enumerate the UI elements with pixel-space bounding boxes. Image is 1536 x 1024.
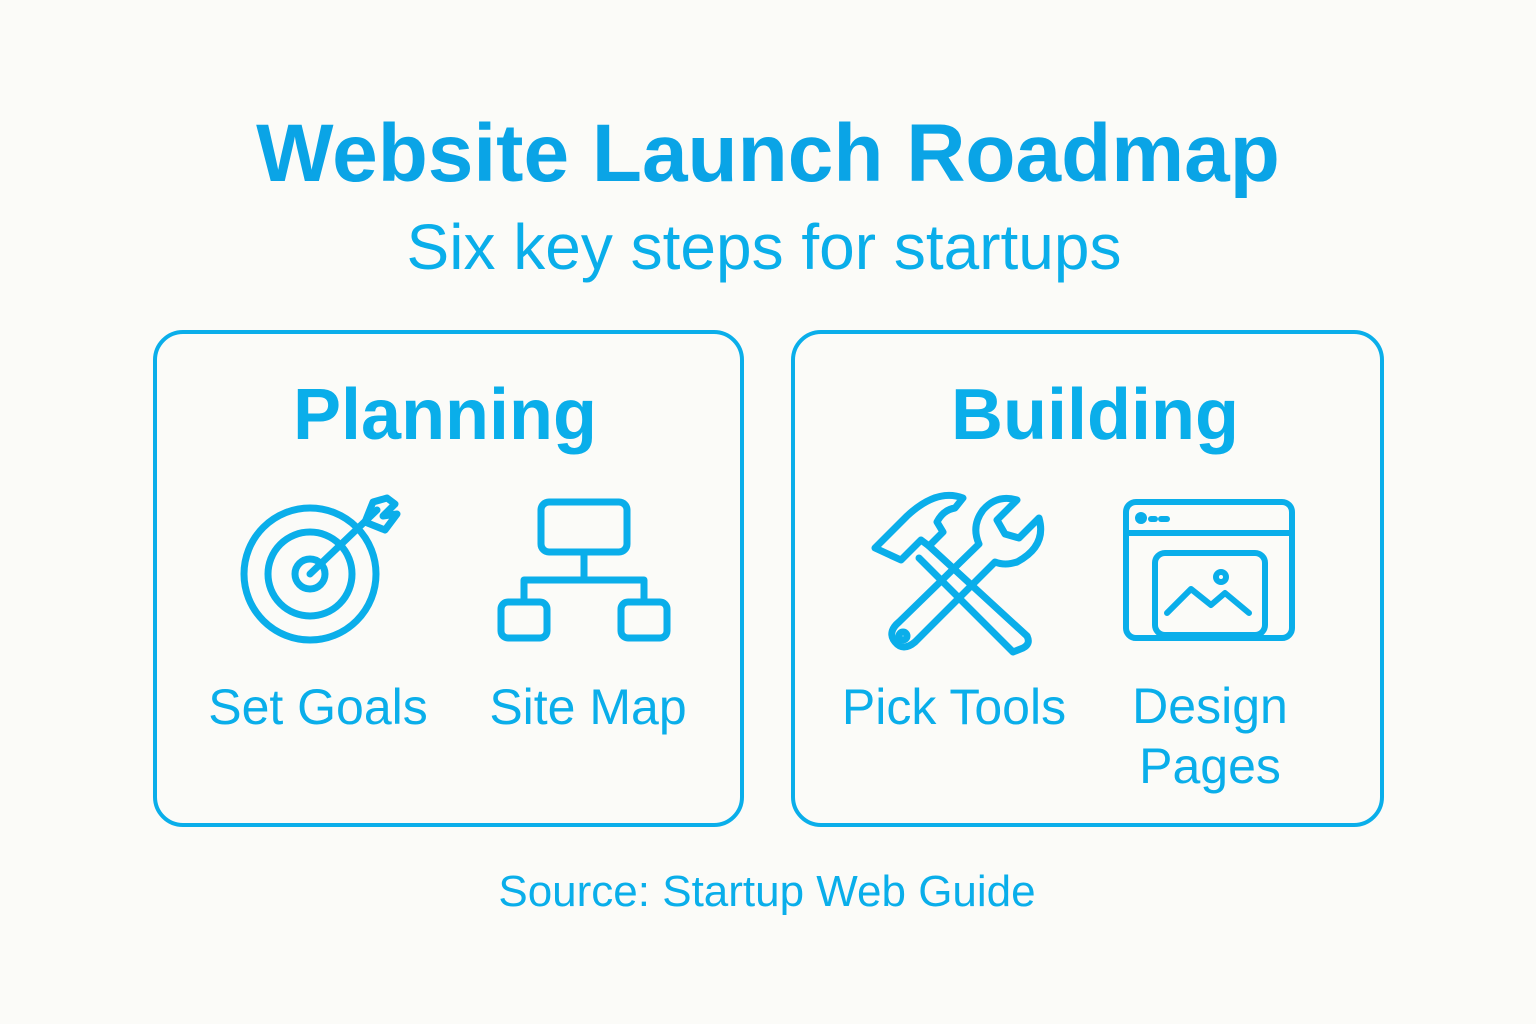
heading: planning: Planning [293, 375, 597, 455]
panel: building [791, 330, 1384, 827]
label: design pages [1132, 678, 1288, 794]
icon: browser page [1123, 499, 1295, 641]
label: set goals: Set Goals [208, 679, 428, 735]
icon: site map [498, 498, 670, 642]
subtitle: Six key steps for startups [407, 211, 1121, 283]
label: pick tools: Pick Tools [842, 679, 1066, 735]
label: design pages: Design [1132, 678, 1288, 734]
panel: planning [153, 330, 744, 827]
source: Source: Startup Web Guide [498, 867, 1036, 916]
heading: building: Building [951, 375, 1239, 455]
label: design pages: Pages [1139, 738, 1281, 794]
icon: target [240, 494, 400, 644]
icon: tools [872, 492, 1044, 656]
label: site map: Site Map [489, 679, 687, 735]
title: Website Launch Roadmap [256, 108, 1280, 199]
